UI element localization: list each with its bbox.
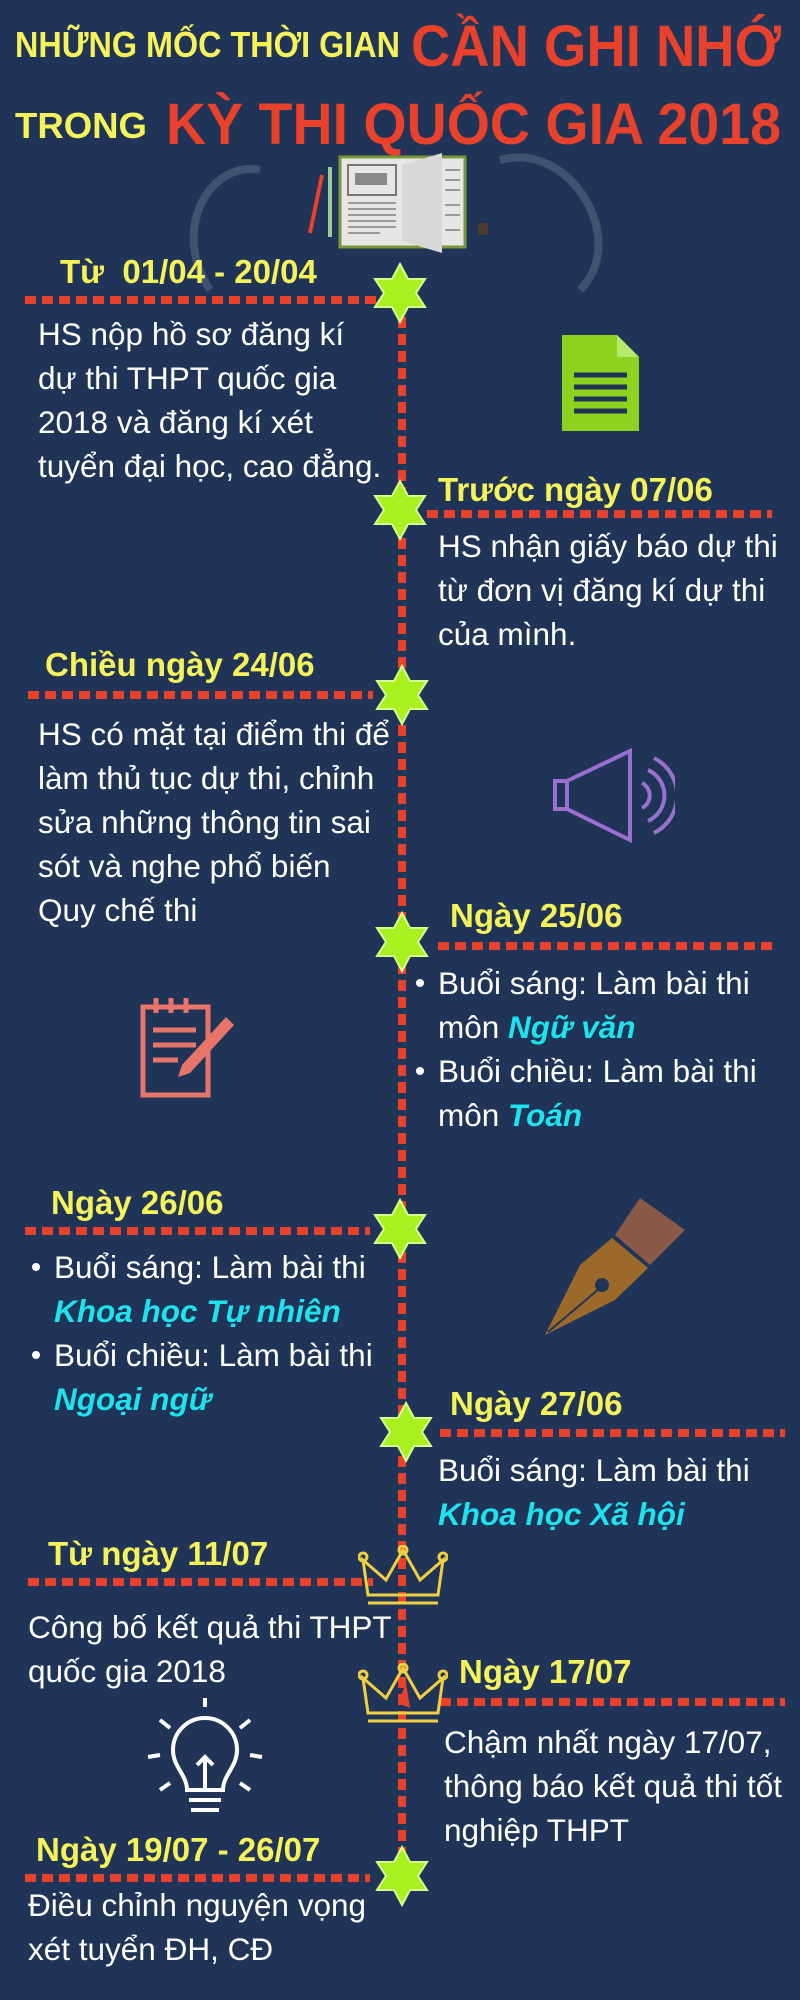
icon: open book xyxy=(308,153,488,253)
text xyxy=(28,1887,366,1967)
text: sót và nghe phổ biến xyxy=(38,848,330,884)
icon: notepad and pencil xyxy=(140,998,234,1098)
icon: crown 1 xyxy=(358,1545,448,1604)
text xyxy=(438,1452,750,1532)
text xyxy=(38,316,381,484)
star 1 xyxy=(373,262,427,324)
star 4 xyxy=(375,911,429,973)
text: HS có mặt tại điểm thi để xyxy=(38,716,390,752)
entry 1 xyxy=(25,253,381,484)
text: HS nộp hồ sơ đăng kí xyxy=(38,316,344,352)
heading: Ngày 17/07 xyxy=(459,1653,631,1690)
text: Công bố kết quả thi THPT xyxy=(28,1609,392,1645)
heading: Từ ngày 11/07 xyxy=(48,1535,268,1572)
text: từ đơn vị đăng kí dự thi xyxy=(438,572,765,608)
bullets xyxy=(416,965,757,1133)
entry 3 xyxy=(28,646,390,928)
icon: speaker xyxy=(553,748,675,843)
title: TRONG xyxy=(15,105,147,146)
title: NHỮNG MỐC THỜI GIAN xyxy=(15,23,400,65)
bullets: môn Ngữ văn xyxy=(438,1009,636,1045)
text: nghiệp THPT xyxy=(444,1812,629,1848)
title: CẦN GHI NHỚ xyxy=(411,14,781,79)
entry 9 xyxy=(25,1831,370,1967)
title xyxy=(15,14,781,157)
heading: Ngày 25/06 xyxy=(450,897,622,934)
heading: Chiều ngày 24/06 xyxy=(45,646,315,683)
entry 2 xyxy=(427,471,778,652)
text xyxy=(438,528,778,652)
bullets: Buổi chiều: Làm bài thi xyxy=(438,1053,757,1089)
heading: Từ 01/04 - 20/04 xyxy=(60,253,317,290)
heading: Trước ngày 07/06 xyxy=(438,471,713,508)
decorative swirl xyxy=(190,154,602,293)
bullets xyxy=(32,1249,373,1417)
text: Khoa học Xã hội xyxy=(438,1496,685,1532)
text: sửa những thông tin sai xyxy=(38,804,371,840)
text: Buổi sáng: Làm bài thi xyxy=(438,1452,750,1488)
bullets: Buổi sáng: Làm bài thi xyxy=(438,965,750,1001)
entry 5 xyxy=(25,1184,373,1417)
icon: lightbulb xyxy=(148,1698,262,1812)
text xyxy=(444,1724,782,1848)
star 2 xyxy=(373,479,427,541)
text: thông báo kết quả thi tốt xyxy=(444,1768,782,1804)
text: Quy chế thi xyxy=(38,892,197,928)
entry 4 xyxy=(416,897,772,1133)
text: Điều chỉnh nguyện vọng xyxy=(28,1887,366,1923)
star 3 xyxy=(375,664,429,726)
text: của mình. xyxy=(438,616,576,652)
bullets: Buổi sáng: Làm bài thi xyxy=(54,1249,366,1285)
text: 2018 và đăng kí xét xyxy=(38,404,313,440)
heading: Ngày 19/07 - 26/07 xyxy=(36,1831,320,1868)
text: dự thi THPT quốc gia xyxy=(38,360,336,396)
text: tuyển đại học, cao đẳng. xyxy=(38,448,381,484)
bullets: Khoa học Tự nhiên xyxy=(54,1293,341,1329)
star 6 xyxy=(379,1401,433,1463)
bullets: Buổi chiều: Làm bài thi xyxy=(54,1337,373,1373)
text xyxy=(28,1609,392,1689)
bullets: môn Toán xyxy=(438,1097,582,1133)
entry 7 xyxy=(28,1535,392,1689)
heading: Ngày 27/06 xyxy=(450,1385,622,1422)
icon: green document xyxy=(562,335,639,431)
entry 8 xyxy=(440,1653,785,1848)
text: quốc gia 2018 xyxy=(28,1653,226,1689)
text: làm thủ tục dự thi, chỉnh xyxy=(38,760,374,796)
text: HS nhận giấy báo dự thi xyxy=(438,528,778,564)
entry 6 xyxy=(438,1385,785,1532)
text: Chậm nhất ngày 17/07, xyxy=(444,1724,771,1760)
star 9 xyxy=(375,1845,429,1907)
icon: crown 2 xyxy=(358,1663,448,1722)
text: xét tuyển ĐH, CĐ xyxy=(28,1931,273,1967)
timeline vertical line xyxy=(398,300,406,1876)
heading: Ngày 26/06 xyxy=(51,1184,223,1221)
title: KỲ THI QUỐC GIA 2018 xyxy=(166,92,781,157)
icon: pen nib xyxy=(545,1198,685,1335)
star 5 xyxy=(373,1198,427,1260)
bullets: Ngoại ngữ xyxy=(54,1381,211,1417)
text xyxy=(38,716,390,928)
